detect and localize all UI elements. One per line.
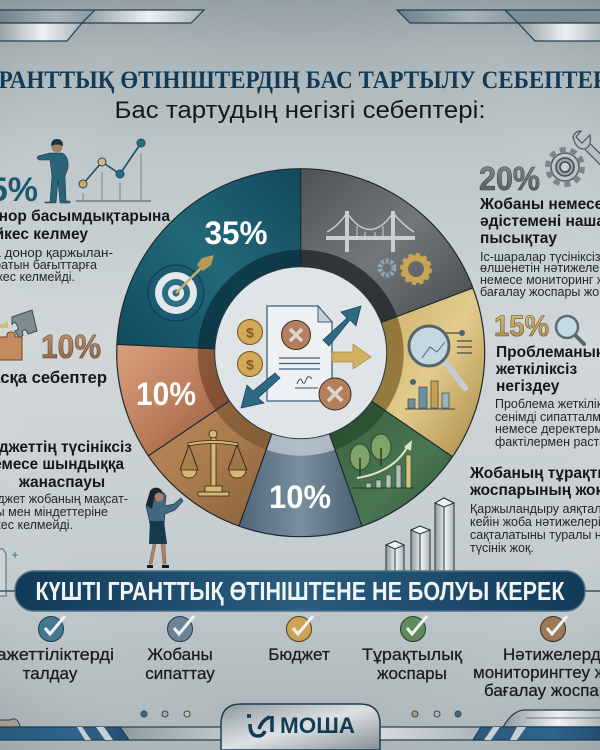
stat block: 20% methodology: Жобаны немесе <box>479 196 600 213</box>
decorative dots <box>141 711 461 717</box>
logo mark <box>247 716 272 736</box>
line chart: rising points <box>76 139 151 201</box>
checklist: project description: Жобаны <box>147 645 213 664</box>
checklist: needs analysis <box>0 616 114 683</box>
stat block: 15% problem justification: жеткіліксіз <box>495 361 577 378</box>
segment: graphite <box>301 169 473 322</box>
stat block: 10% other reasons <box>0 328 107 387</box>
stat block: 20% methodology: 20% <box>479 160 540 197</box>
stat block: 20% methodology: пысықтау <box>480 230 557 247</box>
icon: person with chart <box>37 139 70 203</box>
checklist: sustainability: жоспары <box>377 664 447 683</box>
top left metal bars <box>0 10 204 41</box>
icon: puzzle pieces <box>0 310 37 360</box>
stat block: sustainability plan <box>469 465 600 555</box>
stat block: sustainability plan: түсінік жоқ. <box>470 541 534 555</box>
stat block: 35% donor priorities <box>0 171 170 284</box>
segment: teal 35% <box>117 169 301 349</box>
icon: trees with growth arrow <box>350 434 414 488</box>
checklist: project description: сипаттау <box>145 664 215 683</box>
label: 35%: 35% <box>204 215 268 251</box>
icon: woman presenter <box>146 488 183 568</box>
checklist: project description <box>145 616 215 683</box>
stat block: 15% problem justification: 15% <box>494 310 549 343</box>
donut centre disc <box>215 267 387 439</box>
icon: left edge bottle <box>0 549 18 596</box>
checklist: sustainability: Тұрақтылық <box>362 645 463 664</box>
centre icon: document with coins and arrows: $ <box>246 324 254 340</box>
icon: gear and wrench <box>548 131 600 184</box>
stat block: budget <box>0 439 132 532</box>
top right metal bars <box>397 10 600 41</box>
stat block: 15% problem justification <box>494 310 600 449</box>
footer metal band <box>0 727 600 740</box>
stat block: 20% methodology <box>479 160 600 299</box>
centre icon: document with coins and arrows <box>238 306 371 410</box>
stat block: budget: жанаспауы <box>18 474 105 491</box>
logo plaque: МОША <box>280 713 355 738</box>
segment: gold <box>372 288 485 457</box>
checklist: budget <box>268 616 330 664</box>
icon: target with arrow <box>148 255 214 321</box>
centre icon: document with coins and arrows: $ <box>246 356 254 372</box>
label: steel 10%: 10% <box>269 479 331 515</box>
logo plaque <box>221 704 380 750</box>
segment: green <box>329 401 452 526</box>
stat block: 10% other reasons: 10% <box>41 328 101 365</box>
checklist: needs analysis: талдау <box>23 664 78 683</box>
stat block: 15% problem justification: негіздеу <box>496 378 560 395</box>
segment: copper 10% <box>117 344 230 456</box>
label: copper 10%: 10% <box>136 376 196 412</box>
segment: steel 10% <box>239 434 362 537</box>
icon: magnifier <box>556 316 584 344</box>
checklist: sustainability <box>362 616 463 683</box>
icon: magnifier with bar chart <box>405 326 472 409</box>
footer right plate <box>503 710 600 727</box>
inner shade ring <box>206 258 395 447</box>
footer left plate <box>0 719 20 727</box>
checklist: monitoring <box>473 616 600 700</box>
icon: scales <box>180 430 247 496</box>
checklist: budget: Бюджет <box>268 645 330 664</box>
icon: 3D metal bars <box>386 498 454 571</box>
icon: bridge and gears <box>326 211 430 283</box>
subtitle: Бас тартудың негізгі себептері: <box>114 97 486 124</box>
donut chart <box>117 169 485 537</box>
segment separators <box>117 169 485 537</box>
segment: bronze <box>148 401 272 526</box>
